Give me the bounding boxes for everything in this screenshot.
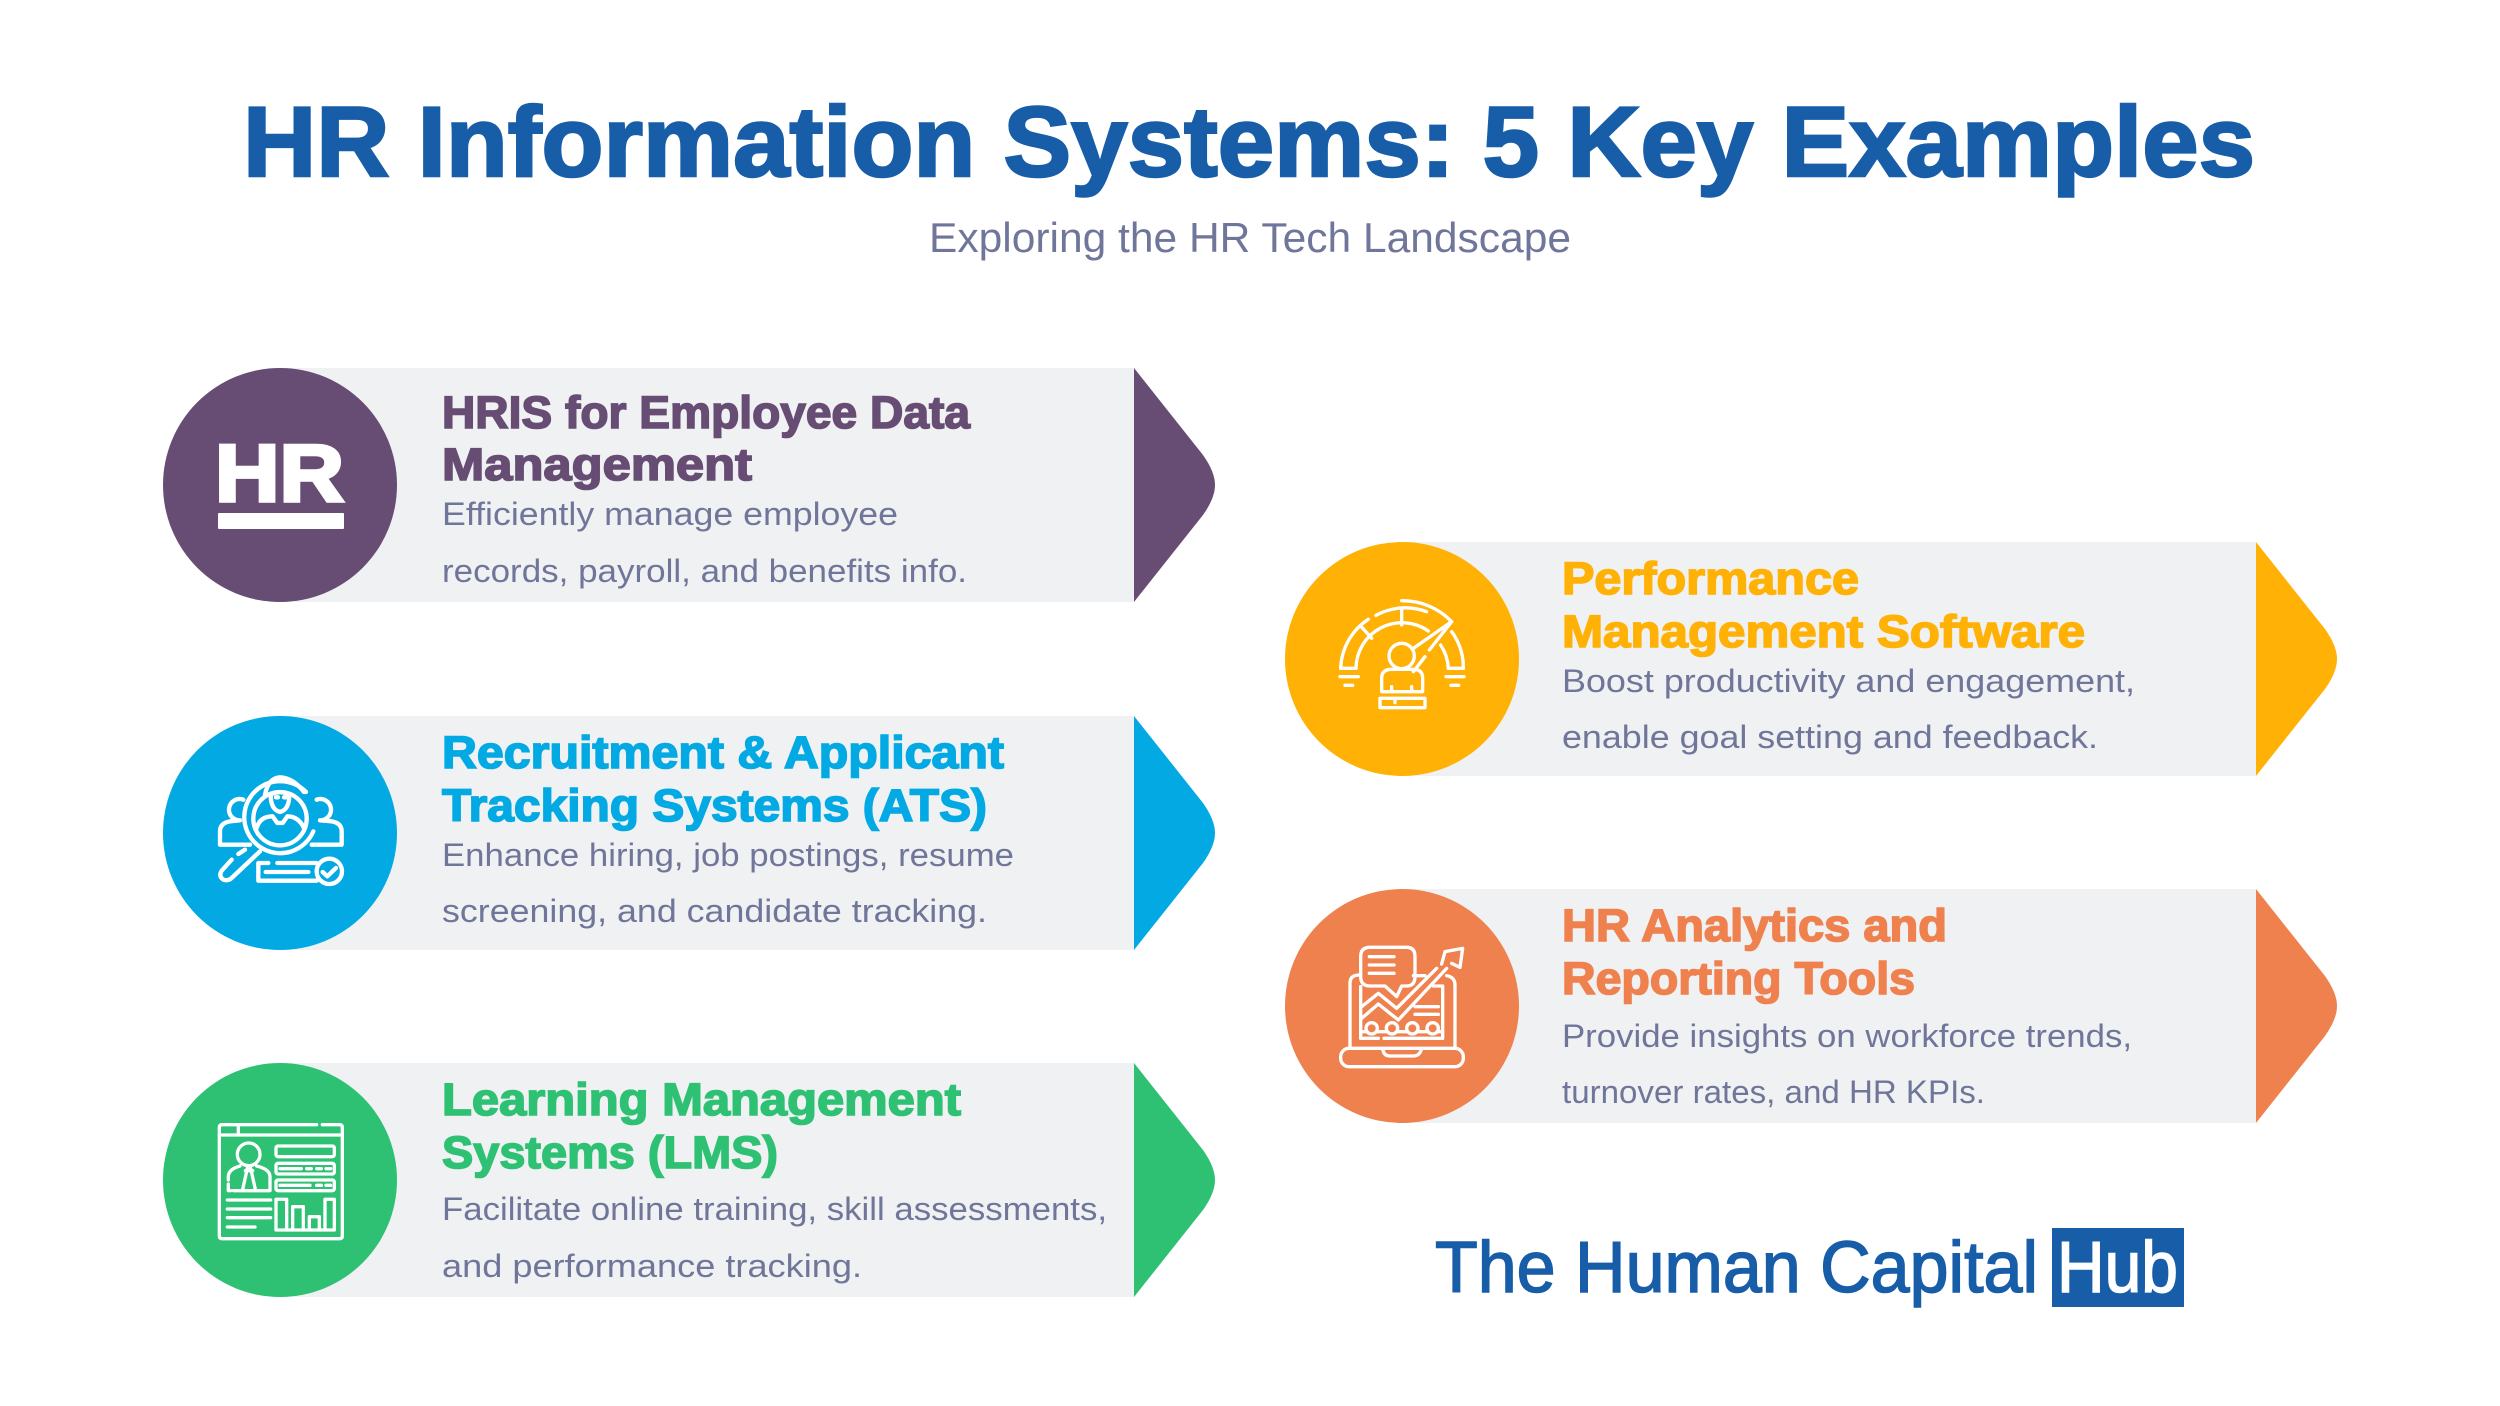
text: HRIS heading: Management <box>442 439 752 490</box>
text: HRIS description: records, payroll, and benefits info. <box>442 553 967 589</box>
text: Recruitment description: screening, and candidate tracking. <box>442 893 987 929</box>
icon circle: yellow <box>1285 542 1519 776</box>
logo: The Human Capital Hub: The Human Capital <box>1435 1228 2038 1308</box>
icon circle: purple <box>163 368 397 602</box>
icon circle: blue <box>163 716 397 950</box>
text: Analytics heading: HR Analytics and <box>1562 900 1947 951</box>
arrow: orange <box>2256 889 2337 1123</box>
text: Performance description: enable goal setting and feedback. <box>1562 719 2098 755</box>
arrow: green <box>1134 1063 1215 1297</box>
panel: Learning Management Systems <box>163 1063 1215 1297</box>
text: Analytics description: turnover rates, and HR KPIs. <box>1562 1074 1985 1110</box>
text: Learning description: Facilitate online training, skill assessments, <box>442 1191 1107 1227</box>
text: Analytics heading <box>1562 900 1947 1004</box>
text: Performance heading: Performance <box>1562 553 1859 604</box>
icon: learner dashboard window <box>219 1125 342 1239</box>
icon: performance gauge with person <box>1340 601 1464 708</box>
logo: The Human Capital Hub: Hub <box>2057 1228 2178 1308</box>
text: Learning heading: Learning Management <box>442 1074 961 1125</box>
icon: laptop with analytics chart <box>1341 947 1463 1067</box>
text: HRIS description: Efficiently manage employee <box>442 496 898 532</box>
text: Recruitment heading <box>442 727 1004 831</box>
text: Performance heading <box>1562 553 2085 657</box>
text: Recruitment heading: Recruitment & Applicant <box>442 727 1004 778</box>
text: Analytics description: Provide insights on workforce trends, <box>1562 1018 2132 1054</box>
text: Recruitment heading: Tracking Systems (ATS) <box>442 780 987 831</box>
icon: magnifier over candidates <box>220 777 342 884</box>
subtitle: Exploring the HR Tech Landscape <box>929 214 1571 261</box>
arrow: blue <box>1134 716 1215 950</box>
text: Performance description <box>1562 663 2135 755</box>
text: HRIS heading <box>442 387 971 490</box>
panel: Performance Management Software <box>1285 542 2337 776</box>
text: Analytics description <box>1562 1018 2132 1110</box>
text: HRIS heading: HRIS for Employee Data <box>442 387 971 438</box>
title: HR Information Systems: 5 Key Examples <box>243 86 2255 197</box>
text: Recruitment description: Enhance hiring, job postings, resume <box>442 837 1014 873</box>
arrow: yellow <box>2256 542 2337 776</box>
text: Performance description: Boost productivity and engagement, <box>1562 663 2135 699</box>
text: Learning heading: Systems (LMS) <box>442 1127 778 1178</box>
icon circle: green <box>163 1063 397 1297</box>
text: Analytics heading: Reporting Tools <box>1562 953 1915 1004</box>
text: HRIS description <box>442 496 967 589</box>
text: Learning description: and performance tracking. <box>442 1248 862 1284</box>
panel: HRIS for Employee Data Management <box>163 368 1215 602</box>
panel: HR Analytics and Reporting Tools <box>1285 889 2337 1123</box>
text: Recruitment description <box>442 837 1014 929</box>
icon circle: orange <box>1285 889 1519 1123</box>
arrow: purple <box>1134 368 1215 602</box>
panel: Recruitment and Applicant Tracking Systems <box>163 716 1215 950</box>
text: Learning description <box>442 1191 1107 1284</box>
icon: HR: HR <box>215 429 344 519</box>
text: Learning heading <box>442 1074 961 1178</box>
text: Performance heading: Management Software <box>1562 606 2085 657</box>
